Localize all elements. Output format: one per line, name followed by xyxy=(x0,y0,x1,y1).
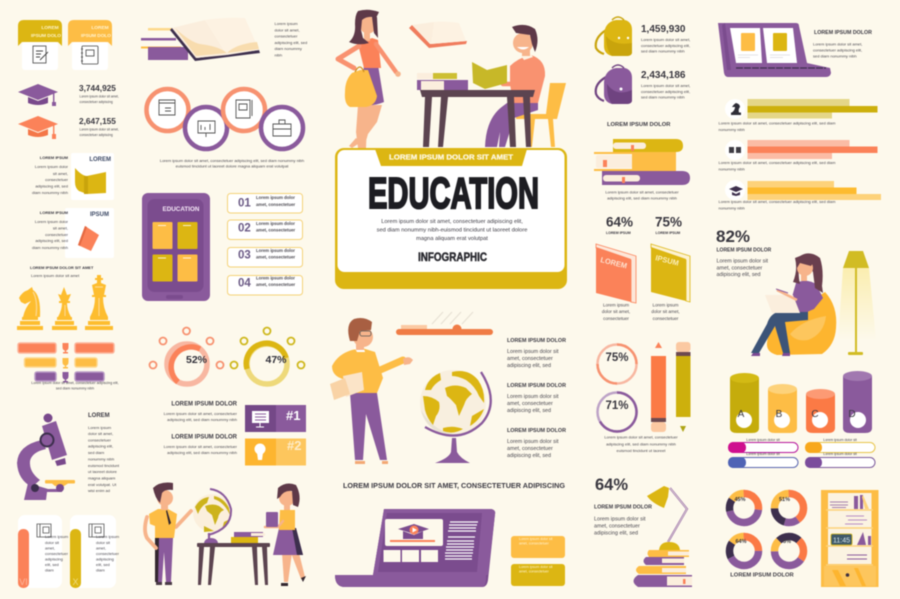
title card frame xyxy=(335,148,567,289)
stat 64% text xyxy=(594,476,652,536)
donut 47% xyxy=(230,328,304,384)
item 01: amet, consectetuer xyxy=(256,202,295,207)
illustration: video laptop xyxy=(335,509,495,587)
book captions: consectetuer xyxy=(653,316,679,321)
gauge 75%: 75% xyxy=(605,352,629,364)
pencil caption: adipiscing elit, sed diam nonummy nibh xyxy=(606,442,676,446)
cylinder C: C xyxy=(811,409,819,420)
stat 82% text: Lorem ipsum dolor sit xyxy=(716,258,769,264)
trophy bars caption: Lorem ipsum dolor sit amet, consectetuer adipiscing elit, xyxy=(31,381,119,385)
tile #1 xyxy=(245,405,306,432)
tile #2 xyxy=(245,438,306,466)
stacked books illustration xyxy=(594,139,690,185)
tile text 2 xyxy=(164,434,238,455)
item 02: amet, consectetuer xyxy=(256,228,295,232)
block 3: amet, consectetuer xyxy=(507,446,553,452)
ring labels: 64% xyxy=(735,539,747,545)
microscope text: erat volutpat. Ut xyxy=(88,482,117,487)
block 1: Lorem ipsum dolor sit xyxy=(507,349,559,355)
icon: chess knight xyxy=(17,287,43,330)
laptop caption xyxy=(813,30,872,58)
open book xyxy=(170,18,260,61)
pill card gold: diam xyxy=(96,568,105,572)
progress amber: Lorem ipsum dolor sit xyxy=(823,438,857,442)
stat 64% text: LOREM IPSUM DOLOR xyxy=(594,504,652,510)
book captions: dolor sit amet, xyxy=(651,309,680,314)
tile #1: #1 xyxy=(286,408,300,423)
tablet device: EDUCATION xyxy=(162,206,200,213)
item 01: Lorem ipsum dolor xyxy=(256,195,295,200)
bars: chess xyxy=(718,99,878,132)
panel: donut charts 52 and 47 xyxy=(150,328,304,384)
book caption: adipiscing elit, sed xyxy=(274,40,307,45)
illustration: flat book xyxy=(396,312,493,335)
book captions xyxy=(602,302,680,321)
note box gold: amet, consectetuer xyxy=(519,570,550,574)
stat 82% text: 82% xyxy=(716,227,750,246)
book caption: dolor sit amet, xyxy=(274,28,300,32)
amber row xyxy=(24,358,97,368)
panel: three lorem blocks xyxy=(507,338,566,459)
block 2: amet, consectetuer xyxy=(507,401,553,407)
laptop caption: sed diam nonummy nibh xyxy=(813,54,857,58)
illustration: man and woman with globe xyxy=(145,483,306,586)
bars: chess: nonummy nibh xyxy=(718,127,745,132)
trousers xyxy=(485,97,538,147)
pencil caption: Lorem ipsum dolor sit amet, consectetuer xyxy=(604,434,678,440)
block 3: LOREM IPSUM DOLOR xyxy=(507,428,566,434)
card: ipsum xyxy=(32,208,114,258)
panel: pencil gauges xyxy=(598,342,690,453)
card: lorem: LOREM IPSUM xyxy=(40,155,69,160)
item 03: amet, consectetuer xyxy=(256,254,295,260)
book captions: Lorem ipsum xyxy=(603,302,629,308)
item 04: Lorem ipsum dolor xyxy=(256,276,295,280)
book captions: dolor sit amet, xyxy=(602,309,630,314)
stat: 1,459,930: consectetuer adipiscing elit, xyxy=(641,43,690,48)
cylinder A xyxy=(730,373,759,433)
ribbon card 2: IPSUM DOLO xyxy=(81,33,111,39)
infographic label: INFOGRAPHIC xyxy=(418,252,487,264)
panel: tablet with books xyxy=(142,193,302,301)
ring 51% xyxy=(774,494,804,522)
stat 82% text: amet, consectetuer xyxy=(716,266,763,272)
book caption: consectetuer xyxy=(274,34,298,38)
book captions: consectetuer xyxy=(603,316,629,321)
pill card gold xyxy=(70,515,120,588)
item 02: 02 xyxy=(238,222,251,234)
pill card coral: consectetuer xyxy=(45,551,69,556)
bars: graduation xyxy=(718,180,881,210)
panel: ring icons xyxy=(146,89,304,168)
ring labels xyxy=(734,497,791,545)
intro paragraph: sed diam nonummy nibh-euismod tincidunt ut laoreet dolore xyxy=(377,228,527,234)
icon: gold pencil xyxy=(676,342,690,432)
title ribbon xyxy=(375,149,527,166)
open green book xyxy=(472,62,507,89)
note box amber: amet, consectetuer xyxy=(519,542,550,546)
laptop caption: LOREM IPSUM DOLOR xyxy=(814,30,872,36)
item 02: Lorem ipsum dolor xyxy=(256,221,295,226)
block 2: Lorem ipsum dolor sit xyxy=(507,394,559,400)
small table with books xyxy=(197,532,270,585)
stacked books caption: adipiscing elit, sed diam nonummy nibh xyxy=(607,196,677,200)
microscope text: LOREM xyxy=(88,413,110,419)
donut 52% xyxy=(150,328,224,384)
panel: open book with stack xyxy=(141,18,307,61)
book stack xyxy=(141,28,188,60)
donut 47%: 47% xyxy=(265,354,287,366)
ring 5% xyxy=(774,536,804,566)
icon: microscope xyxy=(17,414,75,500)
panel: backpack stats xyxy=(596,17,690,104)
item 03: Lorem ipsum dolor xyxy=(256,248,295,253)
pill card coral: elit, sed xyxy=(45,562,59,567)
ribbon card 1: LOREM xyxy=(41,25,59,31)
icon: gold book: IPSUM xyxy=(655,253,680,268)
panel: colored note boxes xyxy=(511,536,565,586)
microscope text: sed diam xyxy=(88,450,105,455)
tile text 1 xyxy=(164,402,238,422)
panel: lorem book cards xyxy=(32,153,114,258)
ribbon card 1: IPSUM DOLO xyxy=(31,33,61,39)
pill card gold: dolor sit xyxy=(96,540,111,545)
stat: 3,744,925: Lorem ipsum dolor sit amet, xyxy=(80,94,119,98)
pencil caption: euismod tincidunt ut laoreet xyxy=(617,448,666,453)
stat: 1,459,930: 1,459,930 xyxy=(641,24,686,35)
bars: graduation: nonummy nibh xyxy=(718,206,745,210)
tile text 2: adipiscing elit, sed diam nonummy nibh xyxy=(167,450,237,455)
main title: EDUCATION xyxy=(368,169,539,218)
tile text 2: Lorem ipsum dolor sit amet, consectetuer xyxy=(164,444,238,449)
microscope text: euismod tincidunt xyxy=(88,463,120,468)
illustration: seated man at table xyxy=(417,25,566,147)
block 3: adipiscing elit, sed xyxy=(507,453,551,459)
stat: 1,459,930: Lorem ipsum dolor sit amet, xyxy=(641,37,690,42)
book caption: nibh xyxy=(274,52,282,58)
pill card gold: Lorem ipsum xyxy=(96,534,120,539)
item 03: 03 xyxy=(238,250,251,262)
panel: ranked text tiles xyxy=(164,402,306,466)
note box gold: Lorem ipsum dolor sit xyxy=(519,565,552,569)
block 1: LOREM IPSUM DOLOR xyxy=(507,338,566,344)
microscope text: magna aliquam xyxy=(88,476,116,480)
block 2: adipiscing elit, sed xyxy=(507,408,551,414)
bars: chess: Lorem ipsum dolor sit amet, consectetuer adipiscing elit, sed diam xyxy=(718,120,836,126)
microscope text: wisi enim ad xyxy=(88,488,110,493)
block 3: Lorem ipsum dolor sit xyxy=(507,439,559,445)
purple row xyxy=(35,372,104,382)
stat 82% text: LOREM IPSUM DOLOR xyxy=(716,248,772,254)
progress blue xyxy=(728,452,798,468)
panel: stacked books xyxy=(594,122,690,200)
ring caption: euismod tincidunt ut laoreet dolore magna aliquam erat volutpat xyxy=(176,164,289,168)
panel: main title card xyxy=(335,148,567,289)
block 1: amet, consectetuer xyxy=(507,356,553,362)
pill card coral: amet, xyxy=(45,546,55,550)
pencil caption xyxy=(604,434,678,453)
ribbon card 2: LOREM xyxy=(91,25,109,31)
progress purple: Lorem ipsum dolor sit xyxy=(823,452,857,456)
cylinder D xyxy=(843,371,872,433)
pill card coral xyxy=(18,515,69,588)
table xyxy=(420,90,535,147)
numbered list xyxy=(228,194,302,295)
stat: 2,434,186: sed diam nonummy nibh xyxy=(641,94,685,100)
icon: gold backpack xyxy=(596,17,632,56)
intro paragraph: Lorem ipsum dolor sit amet, consectetuer adipiscing elit, xyxy=(381,219,523,225)
stat 64% text: Lorem ipsum dolor sit xyxy=(594,516,646,522)
icon: coral pencil xyxy=(651,342,666,432)
stat: 2,434,186: Lorem ipsum dolor sit amet, xyxy=(641,83,690,88)
card: lorem: consectetuer xyxy=(45,177,69,182)
icon: chess king xyxy=(85,275,113,330)
title ribbon: LOREM IPSUM DOLOR SIT AMET xyxy=(389,152,513,162)
illustration: large globe xyxy=(420,370,491,463)
item 01: 01 xyxy=(238,198,251,210)
note box amber: Lorem ipsum dolor sit xyxy=(519,537,552,541)
icon: purple cap xyxy=(18,84,58,106)
stat: 2,647,155 xyxy=(79,116,119,137)
ring labels: 45% xyxy=(734,497,746,503)
note box gold xyxy=(511,564,565,586)
microscope text: adipiscing elit, xyxy=(88,444,113,448)
tile text 1: adipiscing elit, sed diam nonummy nibh xyxy=(167,417,237,422)
panel: bottom pill cards xyxy=(18,515,120,588)
card: lorem: adipiscing elit, sed xyxy=(35,184,68,188)
stat: 2,434,186: consectetuer adipiscing elit, xyxy=(641,89,690,94)
intro paragraph xyxy=(377,219,527,242)
illustration: flying open book xyxy=(409,22,467,48)
stat 82% text xyxy=(716,227,772,278)
book caption: diam nonummy xyxy=(274,46,302,51)
man pointing at globe xyxy=(145,483,191,585)
microscope text: dolor sit amet, xyxy=(88,431,113,436)
pill card coral: adipiscing xyxy=(45,556,63,562)
icon: floor lamp xyxy=(838,251,876,355)
card: ipsum: sit amet, xyxy=(53,226,68,230)
yellow chair xyxy=(516,83,566,147)
chess heading: LOREM IPSUM DOLOR SIT AMET xyxy=(30,265,94,270)
card: ipsum: LOREM IPSUM xyxy=(40,210,69,215)
ring: notebook xyxy=(223,89,265,131)
icon: coral cap xyxy=(18,116,58,139)
panel: cylinder chart xyxy=(728,371,875,468)
laptop caption: consectetuer adipiscing elit, xyxy=(813,48,862,52)
ring caption xyxy=(160,158,304,168)
pill card gold: consectetuer xyxy=(96,551,120,556)
card: lorem: LOREM xyxy=(89,157,111,163)
illustration: bookshelf xyxy=(821,490,878,587)
icon: ebook laptop xyxy=(718,23,831,77)
icon: coral book: LOREM xyxy=(600,255,628,270)
stat 64% text: amet, consectetuer xyxy=(594,524,640,530)
center section heading: LOREM IPSUM DOLOR SIT AMET, CONSECTETUER ADIPISCING xyxy=(343,481,565,490)
ring labels: 51% xyxy=(779,497,790,503)
stat: 2,434,186: 2,434,186 xyxy=(641,70,686,81)
panel: microscope xyxy=(17,413,120,500)
bars: book: Lorem ipsum dolor sit amet, consectetuer adipiscing elit, sed diam xyxy=(718,160,836,165)
cylinder D: D xyxy=(848,409,856,420)
stat: 2,647,155: consectetuer adipiscing xyxy=(80,133,113,137)
cylinder B: B xyxy=(776,409,783,420)
pill card gold: elit, sed xyxy=(96,562,110,567)
stat: 3,744,925: 3,744,925 xyxy=(79,83,116,93)
panel: reader stat xyxy=(716,227,876,356)
pill card coral: dolor sit xyxy=(45,540,60,545)
ribbon card 1 xyxy=(18,20,62,70)
ring caption: Lorem ipsum dolor sit amet, consectetuer adipiscing elit, sed diam nonummy nibh xyxy=(160,158,304,163)
coral sweater xyxy=(510,55,545,103)
stacked books caption xyxy=(605,190,679,200)
microscope text: ut laoreet dolore xyxy=(88,469,118,474)
ring 45% xyxy=(730,494,758,522)
illustration: bookshelf: 11:45 xyxy=(833,538,850,544)
ring: briefcase xyxy=(261,107,303,149)
item 04: 04 xyxy=(238,278,251,290)
table books xyxy=(417,73,468,90)
card: lorem: diam nonummy nibh xyxy=(32,190,68,195)
block 3 xyxy=(507,428,566,459)
progress magenta: Lorem ipsum dolor sit xyxy=(746,438,780,442)
tablet device xyxy=(142,193,210,301)
card: ipsum: IPSUM xyxy=(90,212,109,218)
stat: 3,744,925: consectetuer adipiscing xyxy=(80,100,113,104)
pill card gold: adipiscing xyxy=(96,556,114,562)
panel: trophy bars: sed diam nonummy nibh xyxy=(56,386,94,390)
ring charts caption: LOREM IPSUM DOLOR xyxy=(730,572,795,578)
panel: trophy bars xyxy=(18,343,119,390)
cylinder B xyxy=(768,384,797,433)
tile #2: #2 xyxy=(287,438,301,453)
microscope text xyxy=(88,413,120,493)
progress magenta xyxy=(728,438,798,453)
stat: 1,459,930 xyxy=(641,24,690,54)
stat 75%: LOREM IPSUM xyxy=(656,231,680,235)
card: lorem: sit amet, xyxy=(53,171,68,176)
book caption xyxy=(274,21,307,58)
gauge 71%: 71% xyxy=(605,400,629,412)
card: ipsum: diam nonummy nibh xyxy=(32,245,68,250)
stat: 2,647,155: Lorem ipsum dolor sit amet, xyxy=(80,128,119,132)
illustration: woman on bean bag xyxy=(751,253,836,356)
pill card coral: VI xyxy=(19,577,28,587)
progress purple xyxy=(805,452,875,468)
cylinder A: A xyxy=(738,409,745,420)
laptop caption: Lorem ipsum dolor sit amet, xyxy=(813,42,862,46)
tile text 1: LOREM IPSUM DOLOR xyxy=(171,402,238,408)
panel: desk lamp stat xyxy=(594,476,692,587)
ring: book xyxy=(146,89,188,131)
stat: 1,459,930: sed diam nonummy nibh xyxy=(641,48,685,54)
stat 64% text: 64% xyxy=(595,476,628,494)
microscope text: Lorem ipsum xyxy=(88,425,112,430)
panel: 64 and 75 book stats xyxy=(596,214,690,321)
progress blue: Lorem ipsum dolor sit xyxy=(746,452,780,456)
head xyxy=(512,25,538,56)
stat 64%: 64% xyxy=(606,214,633,230)
intro paragraph: magna aliquam erat volutpat xyxy=(416,236,488,242)
bars: book: nonummy nibh xyxy=(718,166,745,172)
block 1 xyxy=(507,338,566,369)
pill card coral: diam xyxy=(45,568,54,572)
ring: presentation xyxy=(185,107,227,149)
item 04 xyxy=(228,276,302,295)
stat 75%: 75% xyxy=(655,214,682,230)
book caption: Lorem ipsum xyxy=(274,21,298,26)
pill card gold: amet, xyxy=(96,546,106,550)
card: ipsum: Lorem ipsum dolor xyxy=(35,219,69,224)
bars: graduation: Lorem ipsum dolor sit amet, consectetuer adipiscing elit, sed diam xyxy=(718,199,836,204)
progress bars xyxy=(728,438,875,468)
stacked books caption: Lorem ipsum dolor sit amet, consectetuer xyxy=(605,190,679,194)
stat 64%: LOREM IPSUM xyxy=(606,231,631,235)
woman with book xyxy=(265,484,306,586)
stat: 3,744,925 xyxy=(79,83,119,104)
ring 64% xyxy=(730,536,758,566)
block 2: LOREM IPSUM DOLOR xyxy=(507,383,566,389)
icon: chess queen xyxy=(52,287,77,330)
microscope text: consectetuer xyxy=(88,438,112,442)
cylinder C xyxy=(806,389,835,433)
progress amber xyxy=(805,438,875,453)
stacked books heading: LOREM IPSUM DOLOR xyxy=(607,122,671,128)
card: ipsum: consectetuer xyxy=(45,232,69,237)
block 2 xyxy=(507,383,566,414)
donut 52%: 52% xyxy=(186,354,208,366)
coral row xyxy=(18,343,114,354)
tile text 2: LOREM IPSUM DOLOR xyxy=(171,434,238,440)
card: lorem: Lorem ipsum dolor xyxy=(35,164,69,169)
book captions: Lorem ipsum xyxy=(652,302,679,308)
illustration: teacher xyxy=(330,318,413,464)
stat 64% text: adipiscing elit, sed xyxy=(594,530,638,536)
pill card coral: Lorem ipsum xyxy=(45,534,69,539)
panel: ribbon cards xyxy=(18,20,112,70)
icon: desk lamp on books xyxy=(634,486,692,587)
icon: purple backpack xyxy=(596,65,632,104)
illustration: woman with backpack xyxy=(338,10,401,148)
stat: 2,647,155: 2,647,155 xyxy=(79,116,116,126)
pill card gold: X xyxy=(72,577,79,587)
bars: book xyxy=(718,140,878,172)
card: ipsum: adipiscing elit, sed xyxy=(35,238,68,243)
item 01 xyxy=(228,194,302,213)
stat: 2,434,186 xyxy=(641,70,690,100)
block 1: adipiscing elit, sed xyxy=(507,363,551,369)
microscope text: nonummy nibh xyxy=(88,456,114,462)
card: lorem xyxy=(32,153,114,200)
panel: graduation cap stats xyxy=(18,83,119,139)
panel: chess podium xyxy=(17,265,113,330)
title card inner xyxy=(338,150,564,272)
panel: horizontal bar chart xyxy=(718,99,881,210)
item 04: amet, consectetuer xyxy=(256,282,295,287)
tile text 1: Lorem ipsum dolor sit amet, consectetuer xyxy=(164,411,238,416)
stat 82% text: adipiscing elit, sed xyxy=(716,272,761,278)
note box amber xyxy=(511,536,565,558)
chess subtext: Lorem ipsum dolor sit amet xyxy=(31,273,80,278)
panel: laptop with books xyxy=(718,23,872,77)
item 03 xyxy=(228,248,302,267)
ring labels: 5% xyxy=(783,539,791,545)
item 02 xyxy=(228,220,302,240)
panel: four ring charts xyxy=(730,494,804,578)
ribbon card 2 xyxy=(68,20,112,70)
small globe xyxy=(193,489,231,543)
